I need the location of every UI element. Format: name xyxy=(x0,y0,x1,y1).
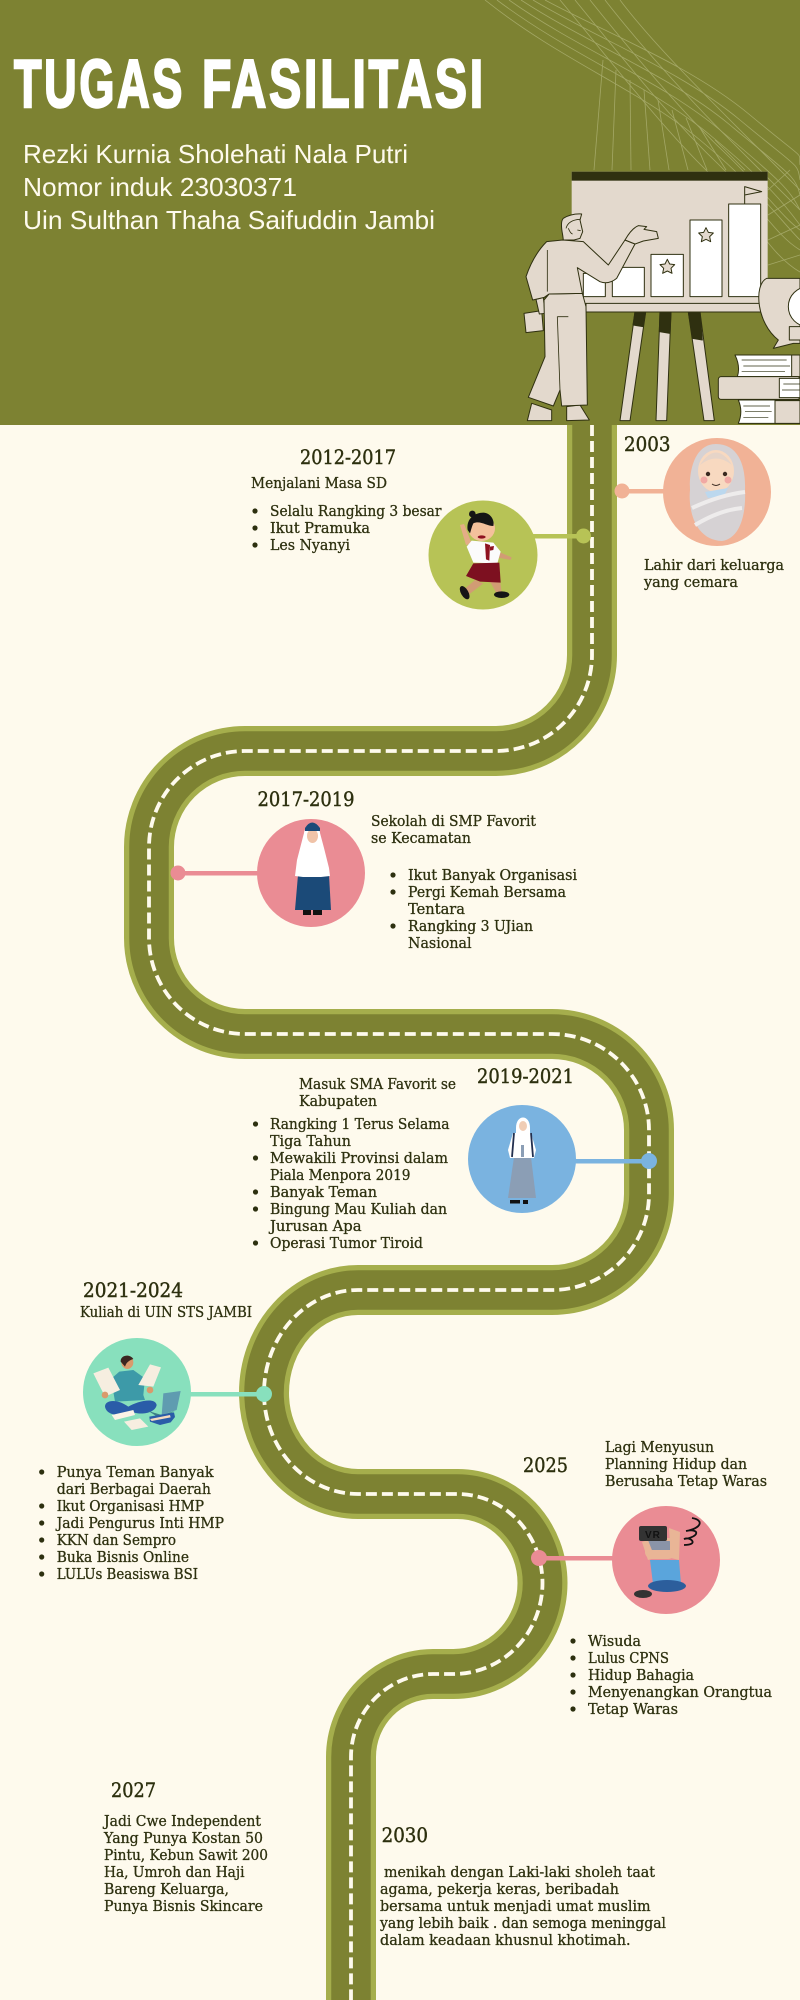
year: 2017-2019 xyxy=(258,787,354,811)
list: Les Nyanyi xyxy=(270,538,350,554)
list: Rangking 1 Terus Selama xyxy=(270,1117,450,1133)
icon: high school girl xyxy=(468,1105,576,1213)
list xyxy=(570,1634,772,1718)
year: 2021-2024 xyxy=(83,1278,183,1302)
description: Yang Punya Kostan 50 xyxy=(103,1831,263,1847)
description: Lagi Menyusun xyxy=(605,1440,714,1456)
list: Tiga Tahun xyxy=(270,1134,351,1150)
connector xyxy=(570,1153,657,1169)
list: Punya Teman Banyak xyxy=(57,1465,214,1481)
list: Operasi Tumor Tiroid xyxy=(270,1236,423,1252)
title: TUGAS xyxy=(14,46,185,122)
header band xyxy=(0,0,800,425)
panel: 2021-2024 xyxy=(39,1278,272,1583)
lightbulb bubble xyxy=(759,278,800,348)
description: yang cemara xyxy=(643,575,738,591)
description xyxy=(299,1077,456,1110)
list: Tentara xyxy=(408,902,465,918)
icon: person with VR headset: VR xyxy=(645,1530,661,1541)
list: Hidup Bahagia xyxy=(588,1668,694,1684)
list xyxy=(253,1117,450,1252)
description: Masuk SMA Favorit se xyxy=(299,1077,456,1093)
connector xyxy=(614,484,672,498)
list: Ikut Banyak Organisasi xyxy=(408,868,577,884)
description: bersama untuk menjadi umat muslim xyxy=(380,1899,651,1915)
description xyxy=(371,814,536,847)
list: Buka Bisnis Online xyxy=(57,1550,189,1566)
description xyxy=(605,1440,767,1490)
list: Selalu Rangking 3 besar xyxy=(270,504,442,520)
panel: 2030 xyxy=(379,1823,666,1949)
panel: 2019-2021 xyxy=(253,1064,657,1252)
description: Planning Hidup dan xyxy=(605,1457,747,1473)
author details: Nomor induk 23030371 xyxy=(23,172,297,202)
description: Punya Bisnis Skincare xyxy=(104,1899,263,1915)
list: LULUs Beasiswa BSI xyxy=(57,1567,198,1583)
books xyxy=(718,355,800,423)
connector xyxy=(530,528,591,544)
list: Banyak Teman xyxy=(270,1185,377,1201)
description: menikah dengan Laki-laki sholeh taat xyxy=(384,1865,655,1881)
list: Ikut Pramuka xyxy=(270,521,370,537)
description: Sekolah di SMP Favorit xyxy=(371,814,536,830)
description: agama, pekerja keras, beribadah xyxy=(380,1882,619,1898)
author details: Rezki Kurnia Sholehati Nala Putri xyxy=(23,139,408,169)
connector xyxy=(531,1550,615,1566)
list: Rangking 3 UJian xyxy=(408,919,533,935)
list: Lulus CPNS xyxy=(588,1651,669,1667)
author details: Uin Sulthan Thaha Saifuddin Jambi xyxy=(23,205,435,235)
description xyxy=(643,558,784,591)
author details xyxy=(23,139,435,235)
description: Ha, Umroh dan Haji xyxy=(104,1865,245,1881)
connector xyxy=(185,1386,272,1402)
panel: 2017-2019 xyxy=(170,787,577,952)
illustration: presenter with chart board and books xyxy=(524,172,800,423)
year: 2025 xyxy=(523,1453,568,1477)
icon: schoolgirl xyxy=(428,500,538,610)
icon: junior high girl xyxy=(257,819,365,927)
list: Piala Menpora 2019 xyxy=(270,1168,410,1184)
year: 2012-2017 xyxy=(300,445,396,469)
list: Jadi Pengurus Inti HMP xyxy=(55,1516,224,1532)
description: Kuliah di UIN STS JAMBI xyxy=(80,1305,252,1321)
description: dalam keadaan khusnul khotimah. xyxy=(380,1933,631,1949)
panel: 2003 xyxy=(614,432,784,591)
description: yang lebih baik . dan semoga meninggal xyxy=(379,1916,666,1932)
list xyxy=(39,1465,224,1583)
description: Menjalani Masa SD xyxy=(251,476,387,492)
list: Wisuda xyxy=(588,1634,641,1650)
list: Bingung Mau Kuliah dan xyxy=(270,1202,447,1218)
description xyxy=(379,1865,666,1949)
panel: 2027 xyxy=(102,1778,268,1915)
panel: 2012-2017 xyxy=(251,445,591,610)
description: Jadi Cwe Independent xyxy=(102,1814,261,1830)
icon: student studying xyxy=(83,1338,191,1446)
list xyxy=(252,504,442,554)
presenter xyxy=(524,214,658,421)
list: Pergi Kemah Bersama xyxy=(408,885,566,901)
title xyxy=(14,46,486,122)
icon: baby xyxy=(663,438,771,546)
description: Berusaha Tetap Waras xyxy=(605,1474,767,1490)
description: Kabupaten xyxy=(299,1094,377,1110)
list: Mewakili Provinsi dalam xyxy=(270,1151,448,1167)
icon: person with VR headset xyxy=(612,1506,720,1614)
description xyxy=(102,1814,268,1915)
list: KKN dan Sempro xyxy=(57,1533,176,1549)
list xyxy=(390,868,577,952)
year: 2030 xyxy=(382,1823,428,1847)
list: Tetap Waras xyxy=(588,1702,678,1718)
title: FASILITASI xyxy=(202,46,486,122)
list: Jurusan Apa xyxy=(268,1219,362,1235)
year: 2027 xyxy=(111,1778,156,1802)
year: 2003 xyxy=(624,432,670,456)
description: Bareng Keluarga, xyxy=(104,1882,229,1898)
list: Menyenangkan Orangtua xyxy=(588,1685,772,1701)
description: Pintu, Kebun Sawit 200 xyxy=(104,1848,268,1864)
description: se Kecamatan xyxy=(371,831,471,847)
list: dari Berbagai Daerah xyxy=(57,1482,211,1498)
connector xyxy=(170,866,263,880)
year: 2019-2021 xyxy=(477,1064,574,1088)
panel: 2025 xyxy=(523,1440,772,1718)
description: Lahir dari keluarga xyxy=(644,558,784,574)
road xyxy=(149,425,649,2000)
board xyxy=(572,172,775,312)
list: Nasional xyxy=(408,936,472,952)
list: Ikut Organisasi HMP xyxy=(57,1499,204,1515)
easel legs xyxy=(620,312,714,421)
